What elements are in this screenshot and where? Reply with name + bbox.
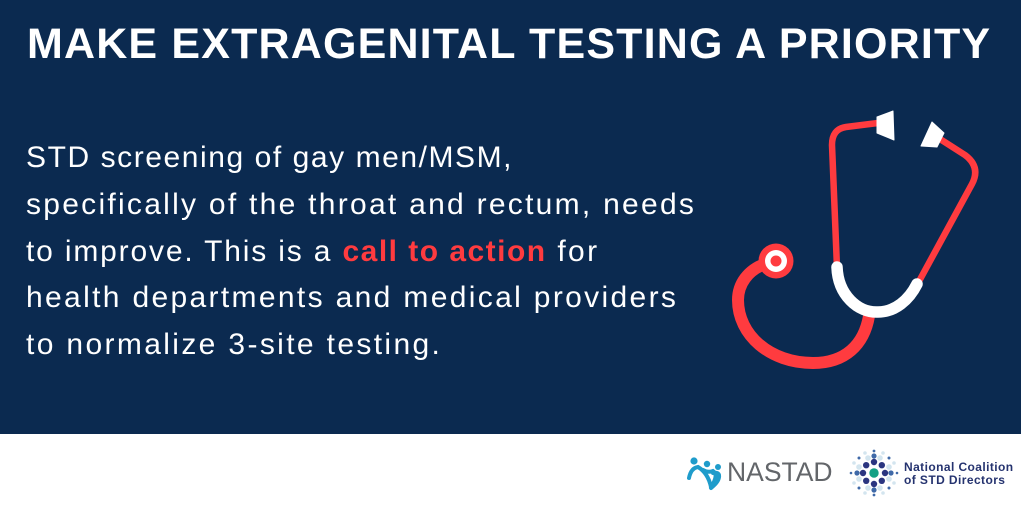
text block: call to action: to normalize 3-site testing. xyxy=(26,328,442,361)
text block: call to action xyxy=(26,141,696,361)
title: MAKE EXTRAGENITAL TESTING A PRIORITY xyxy=(27,20,991,68)
text block: call to action: STD screening of gay men/MSM, xyxy=(26,141,513,174)
logo: coalition name: of STD Directors xyxy=(904,473,1005,487)
logo: coalition name: National Coalition xyxy=(904,460,1014,474)
text block: call to action: health departments and medical providers xyxy=(26,281,678,314)
text block: call to action: to improve. This is a call to action for xyxy=(26,235,600,268)
text block: call to action: specifically of the throat and rectum, needs xyxy=(26,188,696,221)
logo: NASTAD wordmark: NASTAD xyxy=(727,457,833,487)
logo: coalition name xyxy=(904,460,1014,487)
